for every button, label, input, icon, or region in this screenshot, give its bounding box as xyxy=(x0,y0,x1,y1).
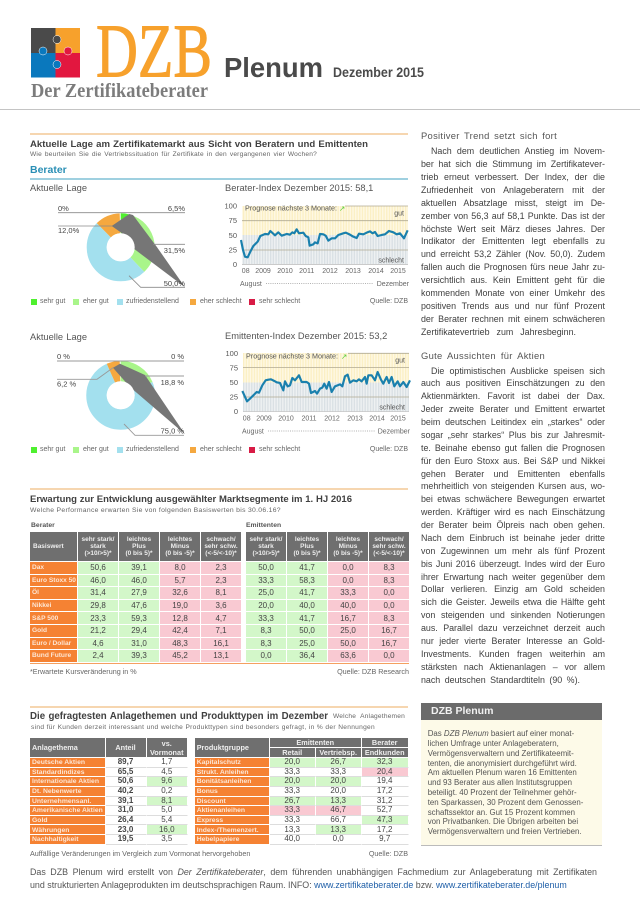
table: Erwartung: Bund Future xyxy=(32,652,71,659)
donut chart: Berater: 31,5% xyxy=(164,246,185,255)
table: Anlagethema: Währungen xyxy=(32,826,69,834)
article body: trieb erneut verbessert. Der Index, der die xyxy=(421,172,605,182)
subheading xyxy=(31,713,405,731)
table: Erwartung: sehr schw. xyxy=(372,543,406,550)
article body: zember von 56,3 auf 58,1 Punkte. Das ist der xyxy=(421,211,605,221)
article body: nach deutschen Standardtiteln (90 %). xyxy=(421,674,580,684)
table: Erwartung: leichtes xyxy=(127,536,151,543)
article body: ber hat sich die Stimmung im Zertifikatever- xyxy=(421,159,605,169)
line chart: Emittenten-Index: gut xyxy=(395,358,405,364)
line chart: Emittenten-Index: 2009 xyxy=(256,416,272,422)
table: Anlagethema xyxy=(30,738,188,845)
box text: ten Sparkassen, 30 Prozent dem Genossen- xyxy=(428,798,583,807)
box text: Am aktuellen Plenum waren 16 Emittenten xyxy=(428,768,577,777)
table: Erwartung: 4,7 xyxy=(215,614,227,623)
legend: Berater: eher schlecht xyxy=(200,298,242,305)
table: Erwartung: stark xyxy=(258,543,274,550)
table: Erwartung: 19,0 xyxy=(172,601,188,610)
subheading: sind für Kunden derzeit interessant und welche Produkttypen sind besonders gefragt, in % der Nennungen xyxy=(31,724,375,731)
article body xyxy=(421,366,605,685)
table: Erwartung: Dax xyxy=(32,564,44,571)
table: Anlagethema: Nachhaltigkeit xyxy=(32,836,78,843)
table: Produktgruppe: Emittenten xyxy=(296,738,334,747)
table: Erwartung: 33,3 xyxy=(340,588,356,597)
donut chart: Emittenten: 18,8 % xyxy=(161,378,184,387)
line chart: Emittenten-Index: 08 xyxy=(243,416,251,422)
table: Erwartung: 46,0 xyxy=(90,576,106,585)
table: Erwartung: (0 bis 5)* xyxy=(293,550,321,557)
table: Erwartung: 31,0 xyxy=(131,639,147,648)
table: Erwartung: 58,3 xyxy=(299,576,315,585)
title: Plenum: Plenum xyxy=(224,52,323,83)
line chart: Emittenten-Index: 0 xyxy=(234,407,238,416)
table: Produktgruppe: Aktienanleihen xyxy=(197,807,245,814)
article body: bis Juni 2016 überzeugt. Indes wird der Euro xyxy=(421,559,605,569)
table: Erwartung: S&P 500 xyxy=(32,615,58,622)
table: Erwartung: 50,0 xyxy=(340,639,356,648)
article body xyxy=(421,146,605,337)
table: Erwartung: (0 bis -5)* xyxy=(333,550,363,557)
table: Erwartung: 59,3 xyxy=(131,614,147,623)
line chart: Emittenten-Index: 50 xyxy=(230,378,238,387)
line chart: Emittenten-Index: 25 xyxy=(230,392,238,402)
table: Erwartung: 13,1 xyxy=(213,651,229,660)
footer text: und strukturierten Anlageprodukten im deutschsprachigen Raum. INFO: www.zertifikateberater.de bzw. www.zertifikateberater.de/plenum xyxy=(30,880,567,890)
chart heading: Berater-Index: Berater-Index Dezember 2015: 58,1 xyxy=(225,183,373,193)
table: Erwartung: sehr stark/ xyxy=(82,536,114,543)
table: Erwartung: 7,1 xyxy=(215,626,227,635)
legend: Emittenten: eher schlecht xyxy=(200,446,242,453)
table: Produktgruppe: Endkunden xyxy=(365,748,405,757)
article body: positiven Trends aus und nur fünf Prozent xyxy=(421,301,605,311)
table: Produktgruppe: Discount xyxy=(197,798,226,805)
article body: und erreicht 53,2 Zähler (Nov. 50,0). Zudem xyxy=(421,249,605,259)
article body: der Berater beim Ölpreis nach oben gehen. xyxy=(421,520,605,530)
donut chart: Berater xyxy=(58,204,185,288)
article body: werden. Kräftiger wird es nach Einschätzung xyxy=(421,507,605,517)
line chart: Berater-Index: 08 xyxy=(242,268,250,275)
line chart: Emittenten-Index: Prognose nächste 3 Monate: xyxy=(246,354,338,360)
article body: für den Euro Stoxx aus. Bei S&P und Nikkei xyxy=(421,456,605,466)
table: Anlagethema: Amerikanische Aktien xyxy=(32,807,103,814)
table: Erwartung: 20,0 xyxy=(258,601,274,610)
table: Erwartung: 0,0 xyxy=(342,563,354,572)
heading: Aktuelle Lage am Zertifikatemarkt aus Sicht von Beratern und Emittenten xyxy=(30,139,368,150)
table: Erwartung: 8,3 xyxy=(260,626,272,635)
logo tagline: Der Zertifikateberater xyxy=(31,81,208,102)
table: Anlagethema: Deutsche Aktien xyxy=(32,759,85,766)
line chart: Emittenten-Index: ↗ xyxy=(341,352,347,361)
donut chart: Emittenten xyxy=(57,352,185,436)
table: Erwartung: 27,9 xyxy=(131,588,147,597)
line chart: Emittenten-Index: 2010 xyxy=(278,416,294,422)
legend: Emittenten: sehr schlecht xyxy=(259,446,300,453)
table: Erwartung: 39,1 xyxy=(131,563,147,572)
source: Quelle: DZB xyxy=(369,849,408,858)
table: Erwartung: 23,3 xyxy=(90,614,106,623)
table: Erwartung: leichtes xyxy=(295,536,319,543)
table: Erwartung: 45,2 xyxy=(172,651,188,660)
article body: Zufriedenheit von Anlageberatern mit der xyxy=(421,185,605,195)
table: Erwartung: Euro Stoxx 50 xyxy=(32,577,76,584)
table: Erwartung: 50,6 xyxy=(90,563,106,572)
table: Erwartung: 21,2 xyxy=(90,626,106,635)
article heading: Positiver Trend setzt sich fort xyxy=(421,130,557,141)
article body: fallen auch die Prognosen fürs neue Jahr zu- xyxy=(421,262,605,272)
box text: und 93 Berater aus allen Institutsgruppen xyxy=(428,778,572,787)
line chart: Emittenten-Index: 2011 xyxy=(301,416,317,422)
article body: der Berater rechnen mit einem schwächeren xyxy=(421,314,605,324)
article body: bei etwas schwächere Bewegungen erwartet xyxy=(421,494,605,504)
table: Produktgruppe: Berater xyxy=(372,738,397,747)
table: Erwartung: 25,0 xyxy=(299,639,315,648)
box text xyxy=(428,729,584,836)
footer text: Das DZB Plenum wird erstellt von Der Zertifikateberater, dem führenden unabhängigen Fachmedium zur Anlageberatung mit Zertifikaten xyxy=(30,867,597,877)
article body: Zertifikatevertrieb zum Jahresbeginn. xyxy=(421,326,576,336)
article body: versichtlich aus. Kein Emittent geht für die xyxy=(421,275,605,285)
line chart: Berater-Index: 2013 xyxy=(345,268,361,275)
article body: Die optimistischen Ausblicke speisen sich xyxy=(431,366,605,376)
logo wordmark: DZB: DZB xyxy=(96,10,212,94)
article body: stärksten nach Aktienanlagen – vor allem xyxy=(421,662,605,672)
article body: Jeder zweite Berater und Emittent erwartet xyxy=(421,404,605,414)
table: Erwartung: sehr stark/ xyxy=(250,536,282,543)
table: Erwartung: stark xyxy=(90,543,106,550)
table: Erwartung: 50,0 xyxy=(299,626,315,635)
table: Erwartung: 16,7 xyxy=(340,614,356,623)
section heading: Berater: Berater xyxy=(30,164,67,176)
donut chart: Emittenten: 0 % xyxy=(171,352,184,361)
table: Erwartung: 39,3 xyxy=(131,651,147,660)
subheading: Wie beurteilen Sie die Vertriebssituation für Zertifikate in den vergangenen vier Wochen? xyxy=(30,151,317,158)
label: Berater: Berater xyxy=(31,522,55,529)
line chart: Berater-Index: 0 xyxy=(233,260,237,269)
table: Erwartung: 32,6 xyxy=(172,588,188,597)
donut chart: Berater: 6,5% xyxy=(168,204,185,213)
table: Erwartung: 47,6 xyxy=(131,601,147,610)
table: Erwartung: 5,7 xyxy=(174,576,186,585)
table: Produktgruppe: Index-/Themenzert. xyxy=(197,826,259,834)
article body: sogar „sehr starkes“ Plus bis zur Jahresmit- xyxy=(421,430,605,440)
table: Erwartung: Plus xyxy=(300,543,314,550)
line chart: Emittenten-Index: 2013 xyxy=(347,416,363,422)
article body: nur jeder vierte Berater Interesse an Gold- xyxy=(421,636,605,646)
table: Erwartung: 8,1 xyxy=(215,588,227,597)
table: Erwartung: 8,0 xyxy=(174,563,186,572)
line chart: Berater-Index xyxy=(224,202,410,288)
line chart: Berater-Index: schlecht xyxy=(378,258,404,264)
legend: Berater: eher gut xyxy=(83,298,109,305)
line chart: Berater-Index: gut xyxy=(394,210,404,218)
legend: Berater: Quelle: DZB xyxy=(370,298,408,305)
line chart: Berater-Index: ↗ xyxy=(339,204,345,213)
article body: Nach dem deutlichen Anstieg im Novem- xyxy=(431,146,605,156)
table: Erwartung: (<-5/<-10)* xyxy=(205,550,237,557)
table: Anlagethema: Gold xyxy=(32,817,47,824)
table: Erwartung: 36,4 xyxy=(299,651,315,660)
article heading: Gute Aussichten für Aktien xyxy=(421,350,545,361)
table: Erwartung: 8,3 xyxy=(383,563,395,572)
issue date: Dezember 2015 xyxy=(333,64,424,80)
article: Positiver Trend xyxy=(421,130,605,337)
table: Erwartung: Minus xyxy=(339,543,357,550)
article body: aktuellen Absatzlage misst, steigt im De- xyxy=(421,198,605,208)
line chart: Emittenten-Index: August xyxy=(242,428,264,436)
table: Erwartung: 0,0 xyxy=(383,651,395,660)
article body: höchste Wert seit März dieses Jahres. Der xyxy=(421,224,605,234)
chart heading: Aktuelle Lage: Aktuelle Lage xyxy=(30,183,87,193)
table: Erwartung: 8,3 xyxy=(383,576,395,585)
legend: Emittenten: zufriedenstellend xyxy=(126,446,179,453)
table: Erwartung: schwach/ xyxy=(374,536,404,543)
table: Anlagethema: Anlagethema xyxy=(32,743,78,752)
source: Quelle: DZB Research xyxy=(337,667,409,676)
table: Produktgruppe: Strukt. Anleihen xyxy=(197,769,249,776)
article body: mehrheitlich von steigenden Kursen aus, wo- xyxy=(421,481,605,491)
footnote: Auffällige Veränderungen im Vergleich zum Vormonat hervorgehoben xyxy=(30,849,250,858)
table: Anlagethema: vs. xyxy=(162,738,172,748)
footer text xyxy=(30,867,597,890)
table: Erwartung: 12,8 xyxy=(172,614,188,623)
logo: puzzle icon xyxy=(31,28,80,78)
table: Erwartung: 0,0 xyxy=(383,588,395,597)
line chart: Berater-Index: 2015 xyxy=(390,268,406,275)
table: Erwartung: 50,0 xyxy=(258,563,274,572)
table: Erwartung: (>10/>5)* xyxy=(252,550,280,557)
legend: Emittenten: Quelle: DZB xyxy=(370,446,408,453)
table: Erwartung: leichtes xyxy=(168,536,192,543)
legend: Emittenten xyxy=(31,446,408,453)
line chart: Emittenten-Index: schlecht xyxy=(379,404,405,412)
article body: te. Beinahe ebenso gut fallen die Prognosen xyxy=(421,443,605,453)
heading: Die gefragtesten Anlagethemen und Produkttypen im Dezember xyxy=(30,711,328,722)
article body: von steigenden und sinkenden Notierungen xyxy=(421,610,605,620)
table: Erwartung: 40,0 xyxy=(340,601,356,610)
line chart: Berater-Index: Dezember xyxy=(377,281,410,288)
line chart: Berater-Index: 2012 xyxy=(322,268,338,275)
table: Erwartung: 25,0 xyxy=(340,626,356,635)
panel: Erwartung Marktsegmente xyxy=(30,488,409,676)
line chart: Berater-Index: 50 xyxy=(229,231,237,240)
line chart: Emittenten-Index xyxy=(225,349,411,436)
table: Produktgruppe xyxy=(195,738,409,845)
box text: Vermögensverwaltern und freien Vertrieben. xyxy=(428,827,582,836)
line chart: Berater-Index: 2014 xyxy=(368,268,384,275)
article body: beim deutschen Leitindex ein „starkes“ oder xyxy=(421,417,605,427)
table: Erwartung xyxy=(30,532,409,662)
legend: Emittenten: eher gut xyxy=(83,446,109,453)
table: Erwartung: 33,3 xyxy=(258,614,274,623)
article body: gehen Berater und Emittenten ebenfalls xyxy=(421,468,605,478)
article body: auch aus positiven Einschätzungen zu den xyxy=(421,378,605,388)
article body: sich die Geister. Jeweils etwa die Hälfte geht xyxy=(421,597,605,607)
table: Produktgruppe: Kapitalschutz xyxy=(197,759,241,766)
table: Produktgruppe: Bonus xyxy=(197,788,218,795)
table: Erwartung: 41,7 xyxy=(299,588,315,597)
line chart: Berater-Index: 75 xyxy=(229,216,237,225)
table: Erwartung: (>10/>5)* xyxy=(84,550,112,557)
line chart: Emittenten-Index: 2014 xyxy=(369,416,385,422)
article body: Aktienmärkten. Favorit ist dabei der Dax. xyxy=(421,391,605,401)
chart heading: Emittenten-Index: Emittenten-Index Dezember 2015: 53,2 xyxy=(225,331,387,341)
article body: Investments. Kunden fragen weiterhin am xyxy=(421,649,605,659)
table: Anlagethema: Unternehmensanl. xyxy=(32,798,91,805)
table: Erwartung: 42,4 xyxy=(172,626,188,635)
subheading: Welche Anlagethemen xyxy=(333,713,405,720)
table: Erwartung: Euro / Dollar xyxy=(32,640,71,647)
line chart: Emittenten-Index: 75 xyxy=(230,364,238,372)
table: Erwartung: Gold xyxy=(32,627,47,634)
table: Erwartung: 29,4 xyxy=(131,626,147,635)
heading: Erwartung zur Entwicklung ausgewählter Marktsegmente im 1. HJ 2016 xyxy=(30,494,352,505)
line chart: Berater-Index: 2010 xyxy=(277,268,293,275)
donut chart: Berater: 0% xyxy=(58,204,69,213)
table: Erwartung: Nikkei xyxy=(32,602,51,609)
table: Produktgruppe: Express xyxy=(197,817,223,824)
panel: Aktuelle Lage am Zertifikatemarkt xyxy=(30,133,411,453)
table: Erwartung: 8,3 xyxy=(260,639,272,648)
legend: Berater xyxy=(31,298,408,305)
table: Produktgruppe: Hebelpapiere xyxy=(197,836,239,843)
legend: Berater: sehr gut xyxy=(40,298,65,305)
donut chart: Emittenten: 6,2 % xyxy=(57,380,77,388)
box text: tenten, die anonymisiert durchgeführt wird. xyxy=(428,759,577,768)
table: Erwartung: 2,3 xyxy=(215,563,227,572)
table: Erwartung: 40,0 xyxy=(299,601,315,610)
donut chart: Berater: 50,0% xyxy=(164,279,185,288)
box text: beteiligt. 40 Prozent der Teilnehmer gehör- xyxy=(428,788,577,797)
table: Erwartung: Plus xyxy=(132,543,146,550)
legend: Berater: sehr schlecht xyxy=(259,298,300,305)
table: Erwartung: 41,7 xyxy=(299,614,315,623)
table: Erwartung: 46,0 xyxy=(131,576,147,585)
table: Erwartung: Basiswert xyxy=(33,543,64,550)
line chart: Berater-Index: August xyxy=(240,281,262,288)
table: Erwartung: Öl xyxy=(32,589,39,596)
subheading: Welche Performance erwarten Sie von folgenden Basiswerten bis 30.06.16? xyxy=(30,507,281,514)
table: Erwartung: 0,0 xyxy=(383,601,395,610)
box text: von Privatbanken. Die Übrigen arbeiten bei xyxy=(428,817,578,826)
box heading: DZB Plenum xyxy=(431,705,493,717)
table: Erwartung: (0 bis 5)* xyxy=(125,550,153,557)
line chart: Emittenten-Index: Dezember xyxy=(378,428,411,436)
legend: Berater: zufriedenstellend xyxy=(126,298,179,305)
article body: Indikator der Emittenten legt ebenfalls zu xyxy=(421,236,605,246)
box text: schaftssektor an. Gut 15 Prozent kommen xyxy=(428,808,575,817)
table: Anlagethema: Anteil xyxy=(115,743,136,752)
table: Erwartung: 31,4 xyxy=(90,588,106,597)
article body: Nach dem Einbruch ist beinahe jeder dritte xyxy=(421,533,605,543)
donut chart: Berater: 12,0% xyxy=(58,226,80,235)
table: Erwartung: 2,4 xyxy=(92,651,104,660)
table: Produktgruppe: Produktgruppe xyxy=(197,743,249,752)
table: Erwartung: (<-5/<-10)* xyxy=(373,550,405,557)
line chart: Emittenten-Index: 2015 xyxy=(390,416,406,422)
table: Erwartung: 63,6 xyxy=(340,651,356,660)
table: Erwartung: 16,7 xyxy=(381,639,397,648)
article body: von Zugewinnen um mehr als fünf Prozent xyxy=(421,546,605,556)
line chart: Berater-Index: 100 xyxy=(224,202,237,210)
article body: Dollar verlieren. Einzig am Gold scheiden xyxy=(421,584,605,594)
line chart: Emittenten-Index: 100 xyxy=(225,349,238,358)
line chart: Berater-Index: 25 xyxy=(229,246,237,254)
table: Erwartung: 41,7 xyxy=(299,563,315,572)
table: Erwartung: 4,6 xyxy=(92,639,104,648)
chart heading: Aktuelle Lage Emittenten: Aktuelle Lage xyxy=(30,332,87,342)
panel: Gefragteste Anlagethemen und Produkttypen xyxy=(30,706,409,858)
article: Gute Aussichten xyxy=(421,350,605,685)
table: Erwartung: 8,3 xyxy=(383,614,395,623)
table: Erwartung: 16,1 xyxy=(213,639,229,648)
line chart: Emittenten-Index: 2012 xyxy=(324,416,340,422)
table: Erwartung: sehr schw. xyxy=(204,543,238,550)
table: Erwartung: 25,0 xyxy=(258,588,274,597)
table: Erwartung: Minus xyxy=(171,543,189,550)
table: Erwartung: 33,3 xyxy=(258,576,274,585)
panel: DZB Plenum info box xyxy=(421,703,602,846)
box text: lichen Umfrage unter Anlageberatern, xyxy=(428,739,559,748)
article body: aus. Parallel dazu verzeichnet derzeit auch xyxy=(421,623,605,633)
table: Anlagethema: Standardindizes xyxy=(32,769,84,776)
table: Erwartung: 48,3 xyxy=(172,639,188,648)
table: Produktgruppe: Bonitätsanleihen xyxy=(197,778,251,785)
table: Erwartung: 29,8 xyxy=(90,601,106,610)
line chart: Berater-Index: 2009 xyxy=(255,268,271,275)
label: Emittenten: Emittenten xyxy=(246,522,281,529)
table: Anlagethema: Dt. Nebenwerte xyxy=(32,788,81,795)
donut chart: Emittenten: 0 % xyxy=(57,352,70,361)
line chart: Berater-Index: Prognose nächste 3 Monate: xyxy=(245,206,337,212)
article body: kommenden Monate von einer Umkehr des xyxy=(421,288,605,298)
table: Erwartung: schwach/ xyxy=(206,536,236,543)
table: Produktgruppe: Retail xyxy=(282,748,302,757)
table: Erwartung: leichtes xyxy=(336,536,360,543)
box text: Das DZB Plenum basiert auf einer monat- xyxy=(428,729,574,738)
box text: Vermögensverwaltern und Zertifikateemit- xyxy=(428,749,574,758)
line chart: Berater-Index: 2011 xyxy=(299,268,314,275)
table: Erwartung: 16,7 xyxy=(381,626,397,635)
table: Erwartung: 0,0 xyxy=(342,576,354,585)
table: Erwartung: 0,0 xyxy=(260,651,272,660)
table: Erwartung: 3,6 xyxy=(215,601,227,610)
legend: Emittenten: sehr gut xyxy=(40,446,65,453)
box heading xyxy=(421,703,602,720)
table: Erwartung: (0 bis -5)* xyxy=(165,550,195,557)
donut chart: Emittenten: 75,0 % xyxy=(161,426,184,436)
table: Anlagethema: Vormonat xyxy=(150,748,184,756)
table: Produktgruppe: Vertriebsp. xyxy=(319,748,357,757)
article body: ihrer Erwartung nach weiter gegenüber dem xyxy=(421,572,605,582)
footnote: *Erwartete Kursveränderung in % xyxy=(30,667,137,676)
table: Erwartung: 2,3 xyxy=(215,576,227,585)
table: Anlagethema: Internationale Aktien xyxy=(32,778,99,785)
